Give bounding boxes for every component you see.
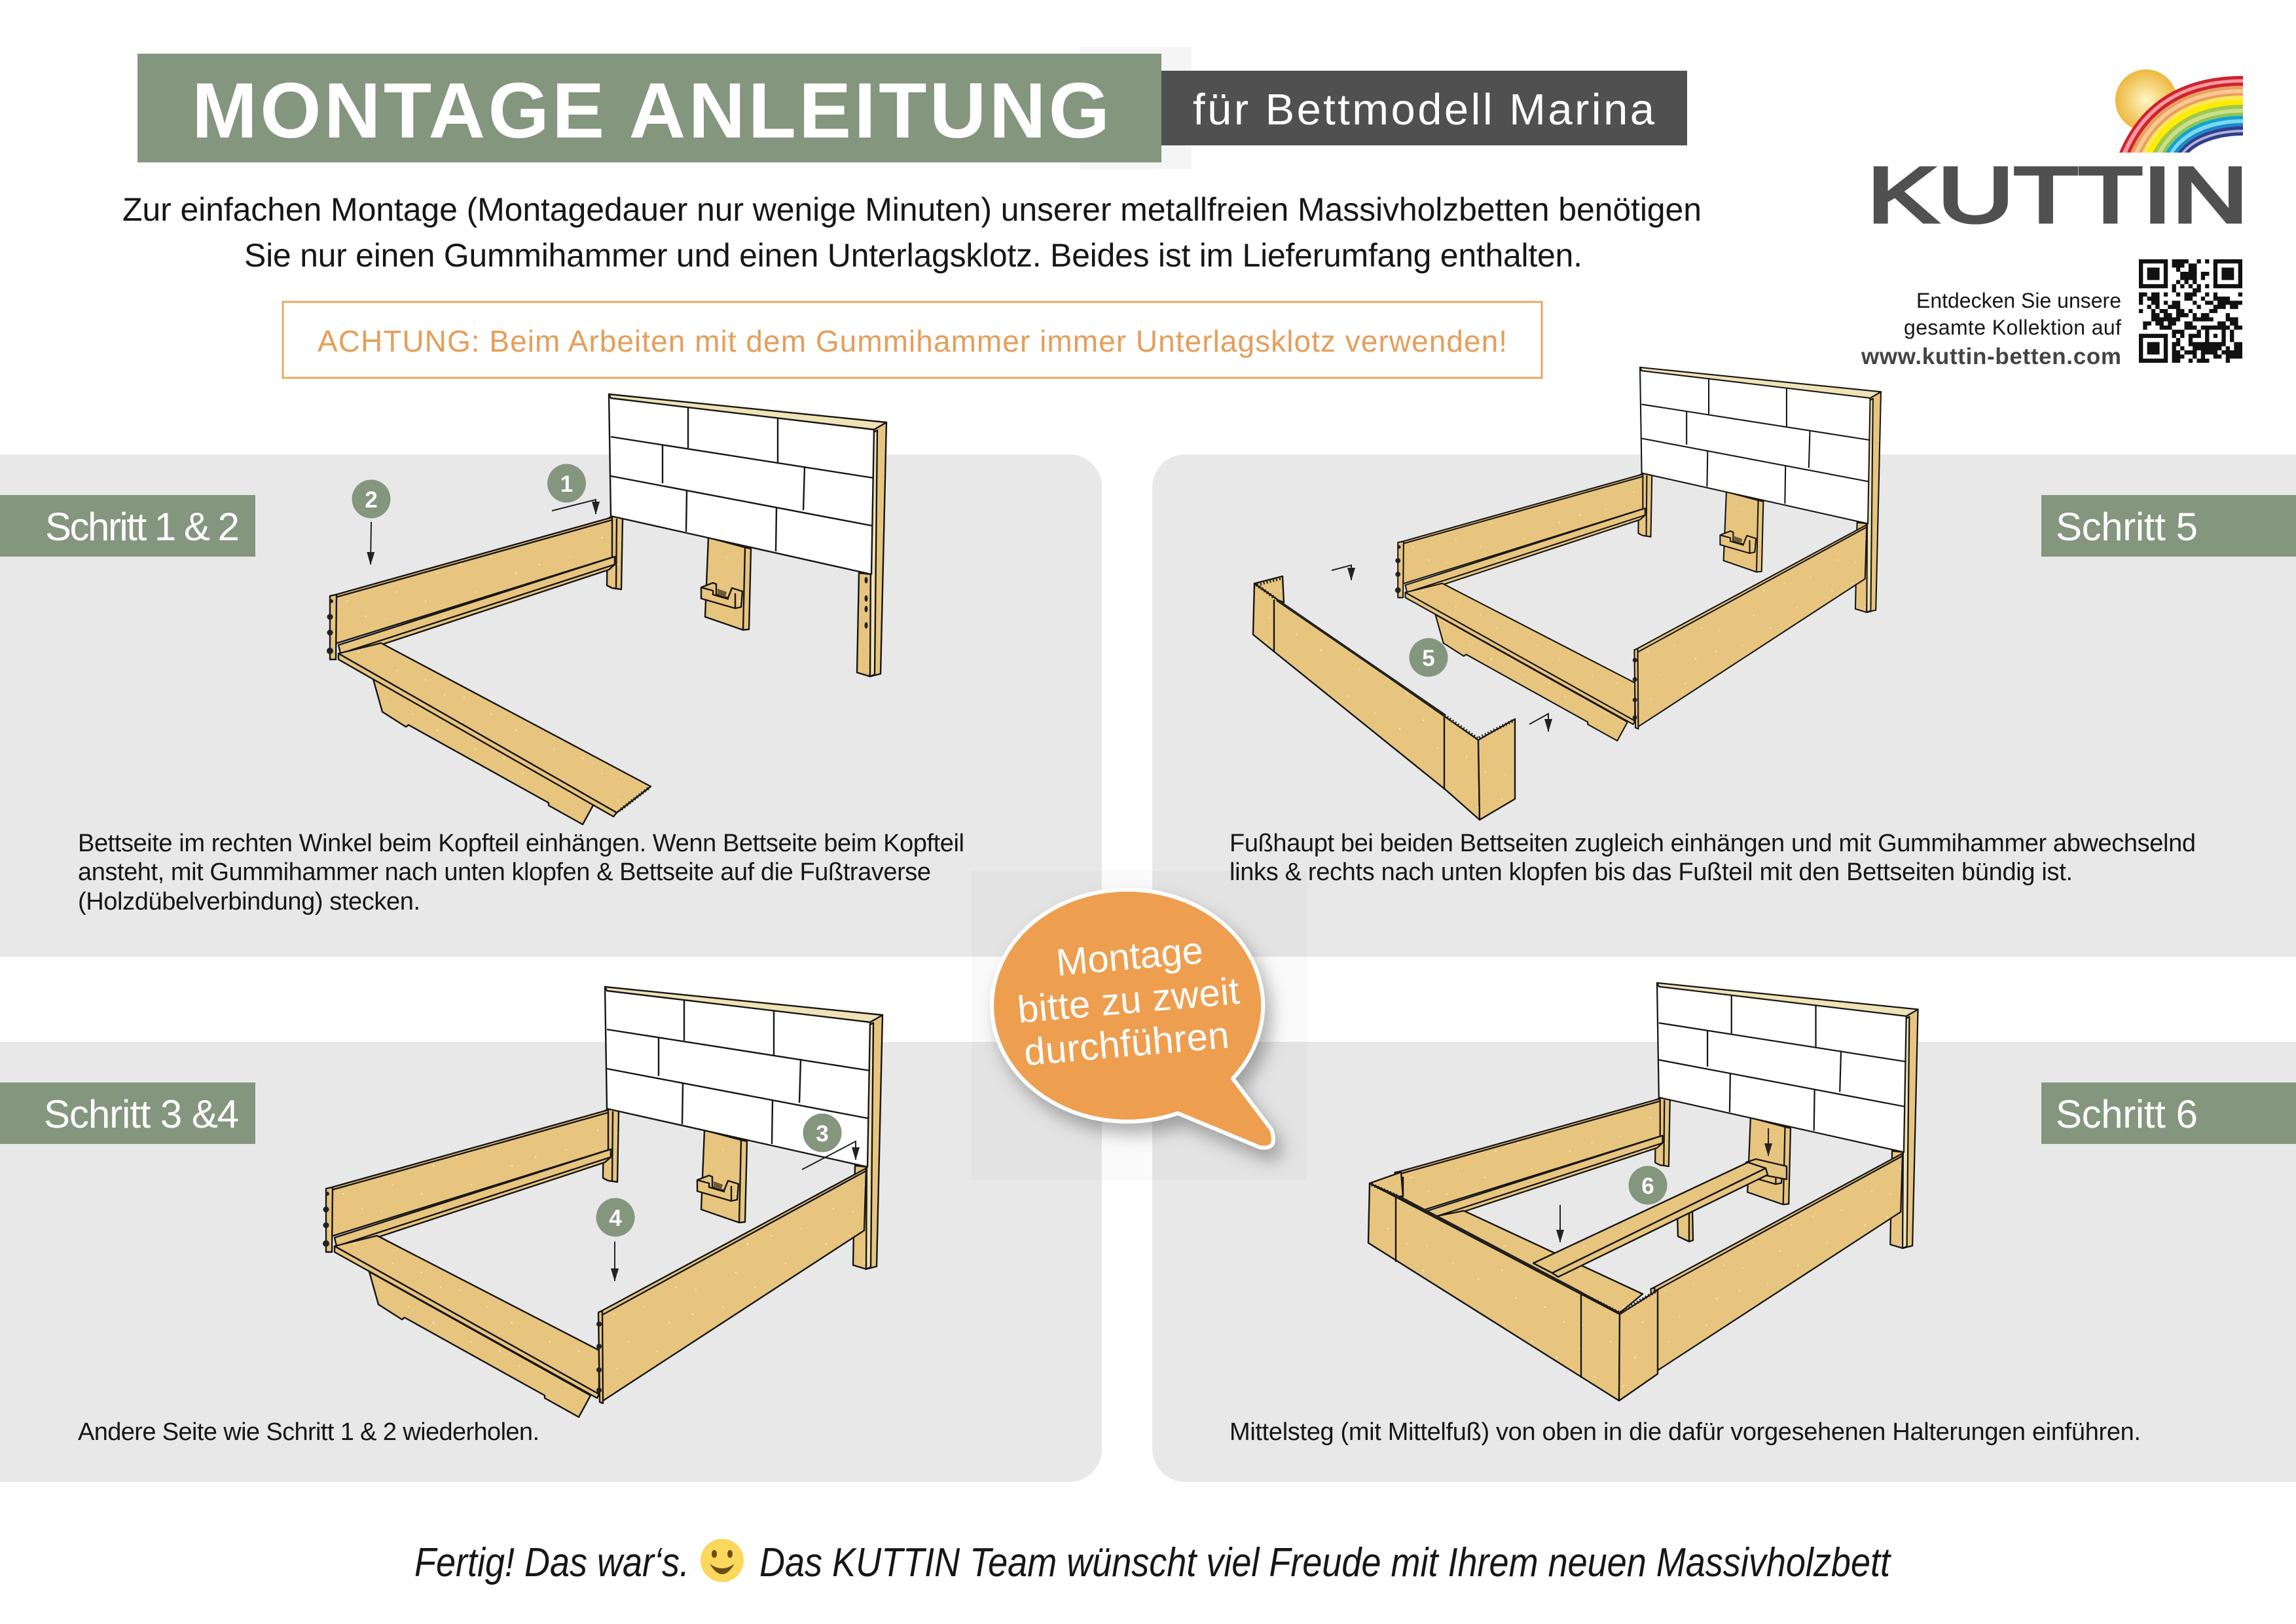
speech bubble: bitte zu zweit <box>1015 970 1241 1031</box>
tab: Schritt 6: Schritt 6 <box>2056 1092 2198 1136</box>
intro text: Sie nur einen Gummihammer und einen Unterlagsklotz. Beides ist im Lieferumfang enthalten. <box>244 237 1582 274</box>
tab: Schritt 3 & 4: Schritt 3 &4 <box>44 1092 239 1136</box>
badge 5: 5 <box>1422 646 1435 671</box>
logo: Kuttin sun, rainbow and wordmark <box>1867 69 2248 239</box>
website note: gesamte Kollektion auf <box>1904 316 2121 339</box>
intro text <box>122 191 1702 274</box>
warning callout: ACHTUNG: Beim Arbeiten mit dem Gummihammer immer Unterlagsklotz verwenden! <box>318 324 1507 358</box>
panel: steps 1 and 2 <box>0 454 1102 957</box>
icon: smiley <box>701 1539 744 1582</box>
warning callout <box>283 302 1542 378</box>
tab: Schritt 1 & 2: Schritt 1 & 2 <box>45 505 240 549</box>
badge 3 with arrow <box>802 1113 856 1170</box>
step 1 and 2 instructions: (Holzdübelverbindung) stecken. <box>78 888 420 915</box>
subtitle bar: für Bettmodell Marina <box>1193 85 1655 134</box>
tab: Schritt 1 & 2 <box>0 495 255 557</box>
speech bubble: Montage <box>1054 929 1205 984</box>
speech bubble: durchführen <box>1022 1014 1231 1074</box>
illustration: footboard <box>1253 576 1515 820</box>
step 5 instructions: links & rechts nach unten klopfen bis das Fußteil mit den Bettseiten bündig ist. <box>1230 858 2073 886</box>
badge 4 with arrow: 4 <box>609 1206 622 1231</box>
website note: www.kuttin-betten.com <box>1861 344 2121 369</box>
badge 3 with arrow: 3 <box>816 1121 829 1147</box>
bubble backing square <box>972 871 1307 1180</box>
subtitle bar <box>1161 71 1687 145</box>
badge 6 <box>1629 1166 1667 1205</box>
illustration: bed step 3 and 4 <box>323 987 883 1417</box>
badge 1 with arrow: 1 <box>560 471 573 497</box>
QR code <box>2139 261 2242 361</box>
tab: Schritt 3 & 4 <box>0 1082 255 1144</box>
badge 2 with arrow <box>352 479 390 564</box>
step 1 and 2 instructions <box>78 830 964 915</box>
tab: Schritt 5 <box>2041 495 2296 557</box>
title: MONTAGE ANLEITUNG <box>192 67 1110 155</box>
tab: Schritt 6 <box>2041 1082 2296 1144</box>
logo: Kuttin sun, rainbow and wordmark: KUTTIN <box>1867 151 2248 239</box>
step 5 instructions: Fußhaupt bei beiden Bettseiten zugleich einhängen und mit Gummihammer abwechselnd <box>1230 830 2196 857</box>
illustration: bed step 6 <box>1368 983 1918 1401</box>
badge 4 with arrow <box>596 1198 635 1281</box>
illustration: bed step 5 <box>1395 367 1881 741</box>
step 5 instructions <box>1230 830 2196 886</box>
website note <box>1861 289 2121 369</box>
title backing square <box>1080 47 1192 169</box>
badge 2 with arrow: 2 <box>365 487 378 513</box>
panel: step 5 <box>1152 454 2296 957</box>
website note: Entdecken Sie unsere <box>1916 289 2121 312</box>
closing message: Fertig! Das war‘s. <box>414 1540 689 1585</box>
badge 6: 6 <box>1641 1173 1654 1199</box>
step 1 and 2 instructions: ansteht, mit Gummihammer nach unten klopfen & Bettseite auf die Fußtraverse <box>78 858 931 886</box>
closing message <box>414 1540 1891 1585</box>
arrow: footboard left <box>1332 565 1351 580</box>
badge 5 <box>1409 638 1448 677</box>
arrow: footboard right <box>1529 714 1548 731</box>
badge 1 with arrow <box>547 464 596 514</box>
arrow: centre beam front <box>1559 1205 1561 1242</box>
step 1 and 2 instructions: Bettseite im rechten Winkel beim Kopfteil einhängen. Wenn Bettseite beim Kopfteil <box>78 830 964 857</box>
step 6 instructions: Mittelsteg (mit Mittelfuß) von oben in die dafür vorgesehenen Halterungen einführen. <box>1230 1418 2141 1446</box>
intro text: Zur einfachen Montage (Montagedauer nur wenige Minuten) unserer metallfreien Massivholzbetten benötigen <box>122 191 1702 228</box>
closing message: Das KUTTIN Team wünscht viel Freude mit Ihrem neuen Massivholzbett <box>759 1540 1891 1585</box>
arrow: centre beam back <box>1768 1128 1769 1156</box>
panel: steps 3 and 4 <box>0 1042 1102 1482</box>
panel: step 6 <box>1152 1042 2296 1482</box>
speech bubble <box>992 890 1273 1148</box>
tab: Schritt 5: Schritt 5 <box>2056 505 2198 549</box>
step 3 and 4 instructions: Andere Seite wie Schritt 1 & 2 wiederholen. <box>78 1418 539 1446</box>
illustration: bed step 1 and 2 <box>327 394 886 824</box>
